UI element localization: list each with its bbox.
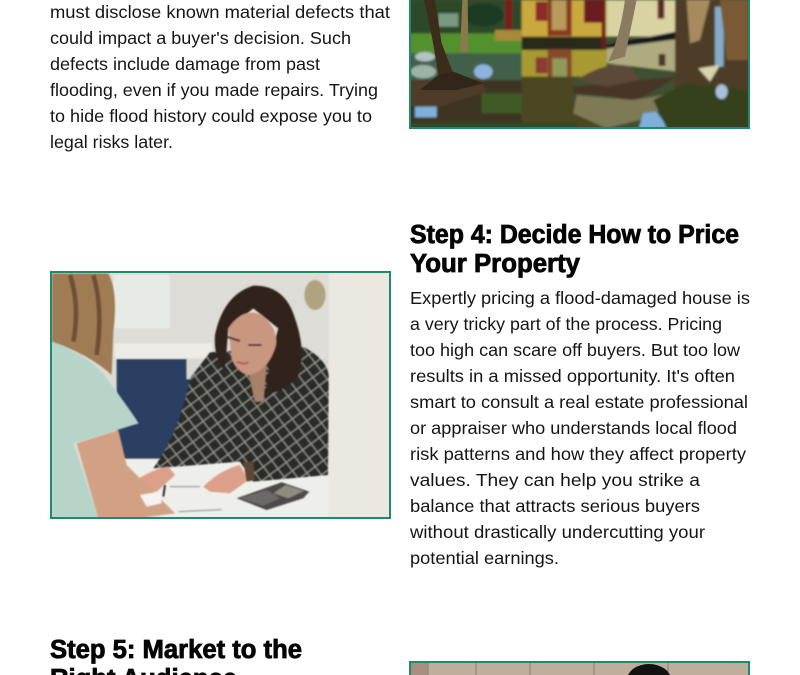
photo: agent reviewing documents with a client — [50, 272, 390, 518]
heading: step 4: Step 4: Decide How to Price — [410, 221, 739, 249]
hair — [215, 286, 302, 394]
neck — [248, 365, 267, 402]
text block: pricing paragraph: potential earnings. — [410, 548, 559, 568]
text block: pricing paragraph: values. They can help you strike a — [410, 470, 700, 490]
text block: pricing paragraph: a very tricky part of the process. Pricing — [410, 314, 722, 334]
heading: step 4: Your Property — [410, 250, 581, 278]
paper and pen — [140, 492, 162, 507]
forearms and hands — [128, 467, 175, 493]
text block: pricing paragraph: Expertly pricing a flood-damaged house is — [410, 288, 750, 308]
text block: pricing paragraph: smart to consult a real estate professional — [410, 392, 748, 412]
photo: flooded house reflected in water — [410, 0, 750, 128]
text block: pricing paragraph: risk patterns and how they affect property — [410, 444, 746, 464]
text block: disclosure paragraph: legal risks later. — [50, 132, 173, 152]
face — [228, 313, 276, 375]
left woman shirt — [52, 342, 139, 518]
text block: pricing paragraph — [409, 288, 750, 568]
blouse — [153, 345, 329, 482]
calculator — [237, 482, 309, 510]
heading: step 4 — [410, 221, 739, 278]
text block: disclosure paragraph: to hide flood history could expose you to — [50, 106, 372, 126]
text block: disclosure paragraph: could impact a buyer's decision. Such — [50, 28, 351, 48]
text block: pricing paragraph: balance that attracts serious buyers — [410, 496, 700, 516]
text block: disclosure paragraph: flooding, even if you made repairs. Trying — [50, 80, 378, 100]
text block: pricing paragraph: results in a missed opportunity. It's often — [410, 366, 735, 386]
text block: disclosure paragraph: defects include damage from past — [50, 54, 320, 74]
text block: pricing paragraph: without drastically undercutting your — [409, 522, 705, 542]
text block: pricing paragraph: too high can scare off buyers. But too low — [410, 340, 740, 360]
heading: step 5: Step 5: Market to the — [50, 636, 302, 664]
photo: person in front of a tiled wall, cropped — [410, 662, 749, 675]
text block: pricing paragraph: or appraiser who understands local flood — [410, 418, 737, 438]
left woman hair — [52, 273, 115, 375]
text block: disclosure paragraph: must disclose known material defects that — [50, 2, 390, 22]
text block: disclosure paragraph — [50, 2, 390, 152]
